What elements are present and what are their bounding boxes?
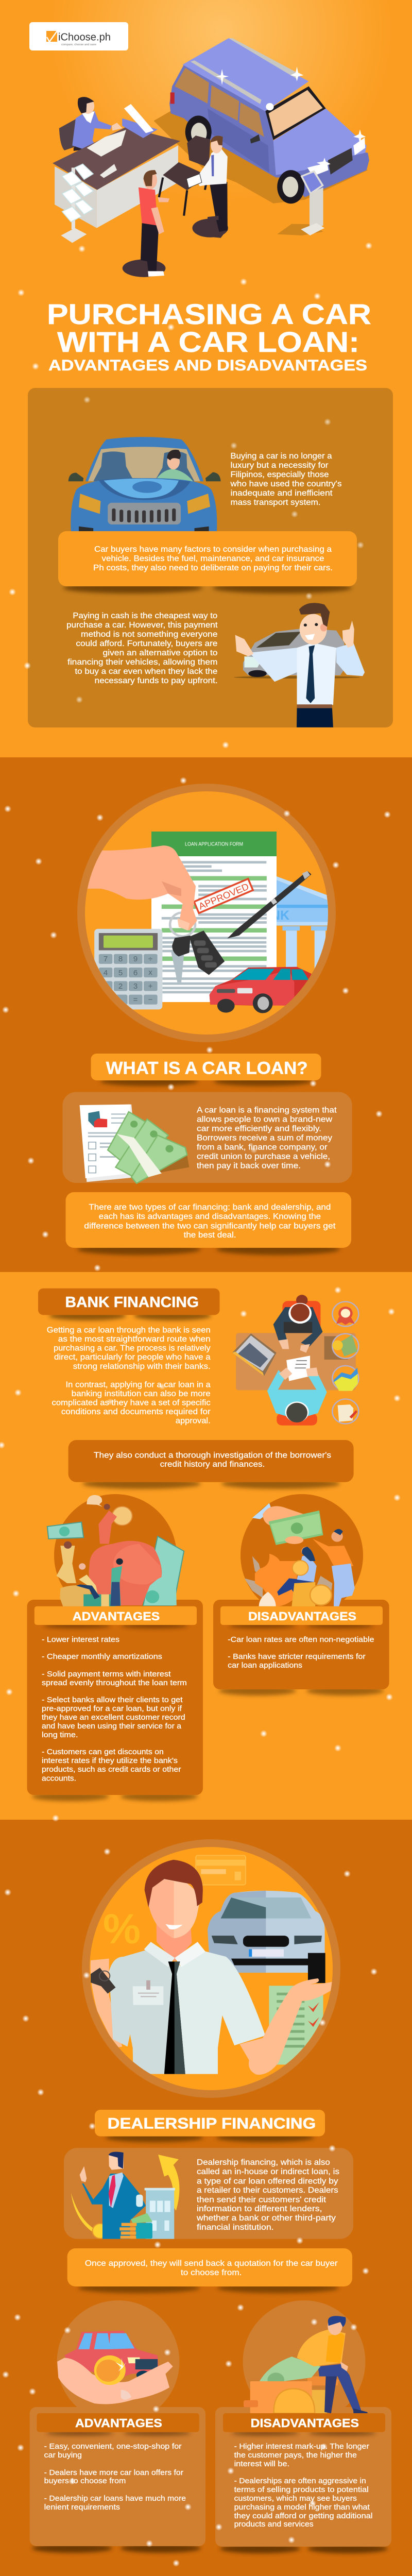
calculator: 7 [104,955,108,963]
list: dealership advantages: lenient requirements [44,2503,120,2512]
text: bank financing description: In contrast, applying for a car loan in a [66,1381,211,1389]
illustration: loan approval circle [77,784,336,1042]
panel: bank advantages [27,1494,203,1795]
salesman figure [91,1860,334,2075]
card shadow [219,1686,384,1696]
callout shadow [63,582,352,594]
text: intro paragraph: Filipinos, especially those [231,470,329,479]
list: dealership advantages: - Dealership car loans have much more [44,2494,186,2503]
text: car loan definition: credit union to purchase a vehicle, [197,1152,330,1161]
list: bank advantages: pre-approved for a car loan, but only if [42,1704,182,1713]
list: dealership disadvantages: - Higher interest mark-up. The longer [234,2442,369,2451]
text: dealership financing description: a retailer to their customers. Dealers [197,2186,338,2195]
client [267,1367,327,1426]
heading: bank financing: BANK FINANCING [65,1294,199,1311]
calculator: 6 [133,969,138,977]
text: car loan definition: allows people to own a brand-new [197,1115,333,1124]
list: bank advantages: and have been using their service for a [42,1722,182,1731]
header: disadvantages [223,2413,385,2432]
text: intro paragraph: mass transport system. [231,498,320,507]
illustration: businessman with coins and building [71,2152,179,2239]
text: car loan definition: then pay it back over time. [197,1161,301,1170]
header: advantages: ADVANTAGES [75,2416,162,2430]
calculator: 4 [104,969,108,977]
hero illustration: car dealership desk [53,38,369,277]
text: paying in cash: financing their vehicles, allowing them [67,658,217,667]
callout shadow [78,2283,339,2293]
callout: quotation: Once approved, they will send back a quotation for the car buyer [85,2259,338,2268]
list: bank advantages: - Select banks allow their clients to get [42,1696,183,1704]
list: bank advantages: - Customers can get discounts on [42,1748,164,1756]
card shadow [220,2544,388,2553]
faint credit card [196,1855,246,1885]
text: paying in cash: necessary funds to pay upfront. [95,676,218,685]
list: dealership disadvantages: they could afford or getting additional [234,2512,373,2520]
list: dealership disadvantages: terms of selling products to potential [234,2485,369,2494]
text: intro paragraph: inadequate and inefficient [231,489,333,498]
calculator: 3 [133,982,138,991]
pen [227,871,312,939]
header: disadvantages: DISADVANTAGES [251,2416,359,2430]
text: car loan definition: A car loan is a financing system that [197,1106,337,1114]
background glow [0,0,412,206]
stamp: approved: APPROVED [197,881,250,911]
section background: what is a car loan [0,757,412,1272]
brochure stand [61,164,93,243]
list: dealership disadvantages: the customer pays, the higher the [234,2451,357,2460]
bank building: BANK [252,908,289,923]
callout: factors to consider [58,531,357,586]
heading shadow [49,1311,211,1320]
heading: what is a car loan: WHAT IS A CAR LOAN? [106,1059,308,1078]
text: paying in cash: given an alternative option to [103,649,218,657]
customer [123,170,169,277]
car [169,38,369,204]
illustration: hand holding a red car and coin [57,2331,173,2404]
text: paying in cash [66,612,218,685]
list: dealership advantages: - Easy, convenient, one-stop-shop for [44,2442,182,2451]
list: dealership disadvantages: customers, which may see buyers [234,2494,357,2503]
red car [210,967,313,1013]
icon column: percent rosette, money, chart, document [332,1302,358,1423]
text: dealership financing description [196,2158,339,2232]
list: dealership advantages: - Dealers have more car loan offers for [44,2468,183,2477]
panel: bank disadvantages [213,1494,389,1689]
text: dealership financing description: Dealership financing, which is also [197,2158,330,2167]
text: paying in cash: method is not something everyone [81,630,218,639]
callout: two types of financing: There are two types of car financing: bank and dealership, and [89,1203,331,1212]
logo wordmark: iChoose.ph [58,32,111,43]
text: intro paragraph [230,452,342,507]
header bar shadow [44,1623,188,1629]
list: bank disadvantages: car loan applications [228,1661,302,1670]
calculator: 8 [118,955,123,963]
woman at desk [59,97,123,151]
heading shadow [100,1077,312,1086]
heading: what is a car loan [91,1054,321,1080]
header bar shadow [229,1623,373,1629]
header bar shadow [232,2431,376,2436]
callout: credit investigation: They also conduct a thorough investigation of the borrower's [94,1451,331,1460]
calculator: 5 [118,969,123,977]
text: intro paragraph: who have used the country's [230,480,342,488]
silver car [208,1891,325,1983]
calculator: − [148,995,153,1004]
list: bank advantages: spread evenly throughout the loan term [42,1679,187,1687]
text: dealership financing description: then send their customers' credit [197,2195,327,2204]
text: bank financing description: approval. [176,1416,211,1425]
section background: dealership financing [0,1820,412,2576]
logo tagline: compare, choose and save [61,43,96,46]
calculator: 9 [133,955,138,963]
illustration: car salesman circle [82,1839,340,2098]
panel: dealership advantages [30,2300,205,2546]
title: WITH A CAR LOAN: [57,326,359,358]
list: bank advantages: accounts. [42,1774,76,1783]
calculator: = [133,995,138,1004]
banker [273,1295,323,1353]
text: paying in cash: Paying in cash is the cheapest way to [73,612,218,620]
illustration: salesman thumbs up with silver car [234,603,365,727]
callout shadow [82,1479,340,1489]
heading: dealership financing [95,2110,325,2137]
list: bank advantages: - Cheaper monthly amortizations [42,1652,162,1661]
callout: two types of financing: the best deal. [184,1231,236,1240]
callout: two types of financing [66,1192,351,1248]
panel: dealership financing description [64,2148,353,2239]
panel: dealership disadvantages [215,2300,391,2547]
calculator: 1 [104,982,108,991]
list: dealership disadvantages: purchasing a model higher than what [234,2503,370,2512]
list: dealership disadvantages: interest will be. [234,2460,289,2468]
title: ADVANTAGES AND DISADVANTAGES [48,357,367,374]
calculator [94,929,162,1009]
list: bank advantages [42,1635,187,1783]
illustration: hand passing cash and orange piggy [244,1503,355,1606]
title: PURCHASING A CAR [47,298,371,330]
section background: bank financing [0,1272,412,1820]
list: dealership advantages: car buying [44,2451,82,2460]
paper [286,1355,310,1381]
list: bank disadvantages: - Banks have stricter requirements for [228,1652,366,1661]
card shadow [32,1792,198,1801]
chair [159,135,210,216]
text: bank financing description: as the most straightforward route when [58,1335,211,1344]
text: car loan definition: Borrowers receive a sum of money [197,1133,332,1142]
text: bank financing description: complicated as they have a set of specific [52,1398,211,1408]
watermark percent sign: % [103,1906,141,1953]
illustration: bank meeting from above [232,1295,358,1426]
section background: intro [0,0,412,757]
illustration: insurance papers and cash [80,1105,189,1183]
header bar shadow [46,2431,191,2436]
heading shadow [106,2133,314,2142]
illustration: blue car front with driver [68,437,221,532]
text: bank financing description: strong relationship with their banks. [73,1362,211,1371]
list: bank disadvantages [228,1635,374,1670]
callout shadow [77,1244,340,1255]
text: paying in cash: could afford. Fortunately, buyers are [76,639,218,648]
callout: two types of financing: difference between the two can significantly help car buyers get [84,1222,336,1230]
header: disadvantages: DISADVANTAGES [248,1609,356,1623]
title [47,298,371,374]
text: bank financing description: purchasing a car. The process is relatively [54,1344,211,1352]
text: intro paragraph: luxury but a necessity for [231,461,329,470]
list: bank advantages: - Lower interest rates [42,1635,119,1644]
callout: factors to consider: Car buyers have many factors to consider when purchasing a [94,545,332,554]
list: bank advantages: - Solid payment terms with interest [42,1670,171,1679]
car sparkles [216,66,366,170]
text: paying in cash: purchase a car. However, this payment [66,621,218,630]
bank building [277,876,328,969]
text: car loan definition: car more efficiently and flexibly. [197,1124,321,1133]
text: dealership financing description: financial institution. [197,2223,274,2232]
form: loan application [151,832,277,1002]
calculator: x [148,968,152,977]
logo: top badge [29,22,128,50]
list: dealership advantages: buyers to choose from [44,2477,126,2485]
text: bank financing description: Getting a car loan through the bank is seen [47,1326,211,1334]
salesman [186,136,228,238]
desk [53,104,180,228]
header: disadvantages [220,1606,383,1625]
heading: dealership financing: DEALERSHIP FINANCING [108,2115,316,2132]
text: car loan definition [197,1106,337,1170]
card shadow [32,2544,201,2553]
header: advantages [37,2413,199,2432]
illustration: worried man on wallet [244,2316,368,2414]
text: bank financing description [47,1326,211,1425]
laptop [232,1333,277,1376]
callout: quotation: to choose from. [181,2268,242,2277]
header: advantages [35,1606,197,1625]
text: dealership financing description: information to different lenders, [197,2205,322,2213]
list: bank advantages: products, such as credit cards or other [42,1765,181,1774]
list: bank disadvantages: -Car loan rates are often non-negotiable [228,1635,374,1644]
form heading: LOAN APPLICATION FORM [185,842,243,847]
text: bank financing description: conditions and documents required for [61,1408,211,1416]
list: bank advantages: interest rates if they utilize the bank's [42,1756,178,1765]
header: advantages: ADVANTAGES [73,1609,160,1623]
text: paying in cash: to buy a car even when they lack the [75,667,218,676]
calculator: 2 [118,982,123,991]
callout: quotation [67,2248,352,2286]
callout: two types of financing: each has its advantages and disadvantages. Knowing the [99,1212,321,1221]
list: bank advantages: they have an excellent customer record [42,1713,185,1722]
icon: logo check square [46,31,57,42]
checklist [269,1986,323,2064]
list: dealership advantages [44,2442,186,2512]
list: dealership disadvantages [234,2442,373,2529]
list: bank advantages: long time. [42,1731,78,1739]
text: bank financing description: banking institution can also be more [72,1389,211,1398]
display kiosk [301,172,324,235]
text: car loan definition: from a bank, finance company, or [197,1143,328,1151]
text: intro paragraph: Buying a car is no longer a [231,452,332,461]
callout: credit investigation: credit history and finances. [160,1460,265,1469]
text: dealership financing description: a type of car loan offered directly by [197,2177,338,2185]
text: dealership financing description: whether a bank or other third-party [196,2214,336,2223]
text: dealership financing description: called an in-house or indirect loan, is [197,2167,339,2176]
calculator: ÷ [148,955,152,963]
callout: credit investigation [68,1440,354,1482]
text: bank financing description: direct, particularly for people who have a [54,1353,211,1362]
callout: factors to consider: Ph costs, they also need to deliberate on paying for their cars. [93,564,333,572]
panel: intro [28,388,393,727]
illustration: piggy bank with happy people [47,1495,184,1606]
list: dealership disadvantages: - Dealerships are often aggressive in [234,2477,366,2485]
panel: car loan definition [62,1092,352,1183]
callout: factors to consider: vehicle. Besides the fuel, maintenance, and car insurance [102,554,324,563]
heading: bank financing [38,1289,219,1315]
list: dealership disadvantages: products and services [234,2520,314,2529]
calculator: + [148,982,153,991]
hand holding car keys [87,845,225,982]
